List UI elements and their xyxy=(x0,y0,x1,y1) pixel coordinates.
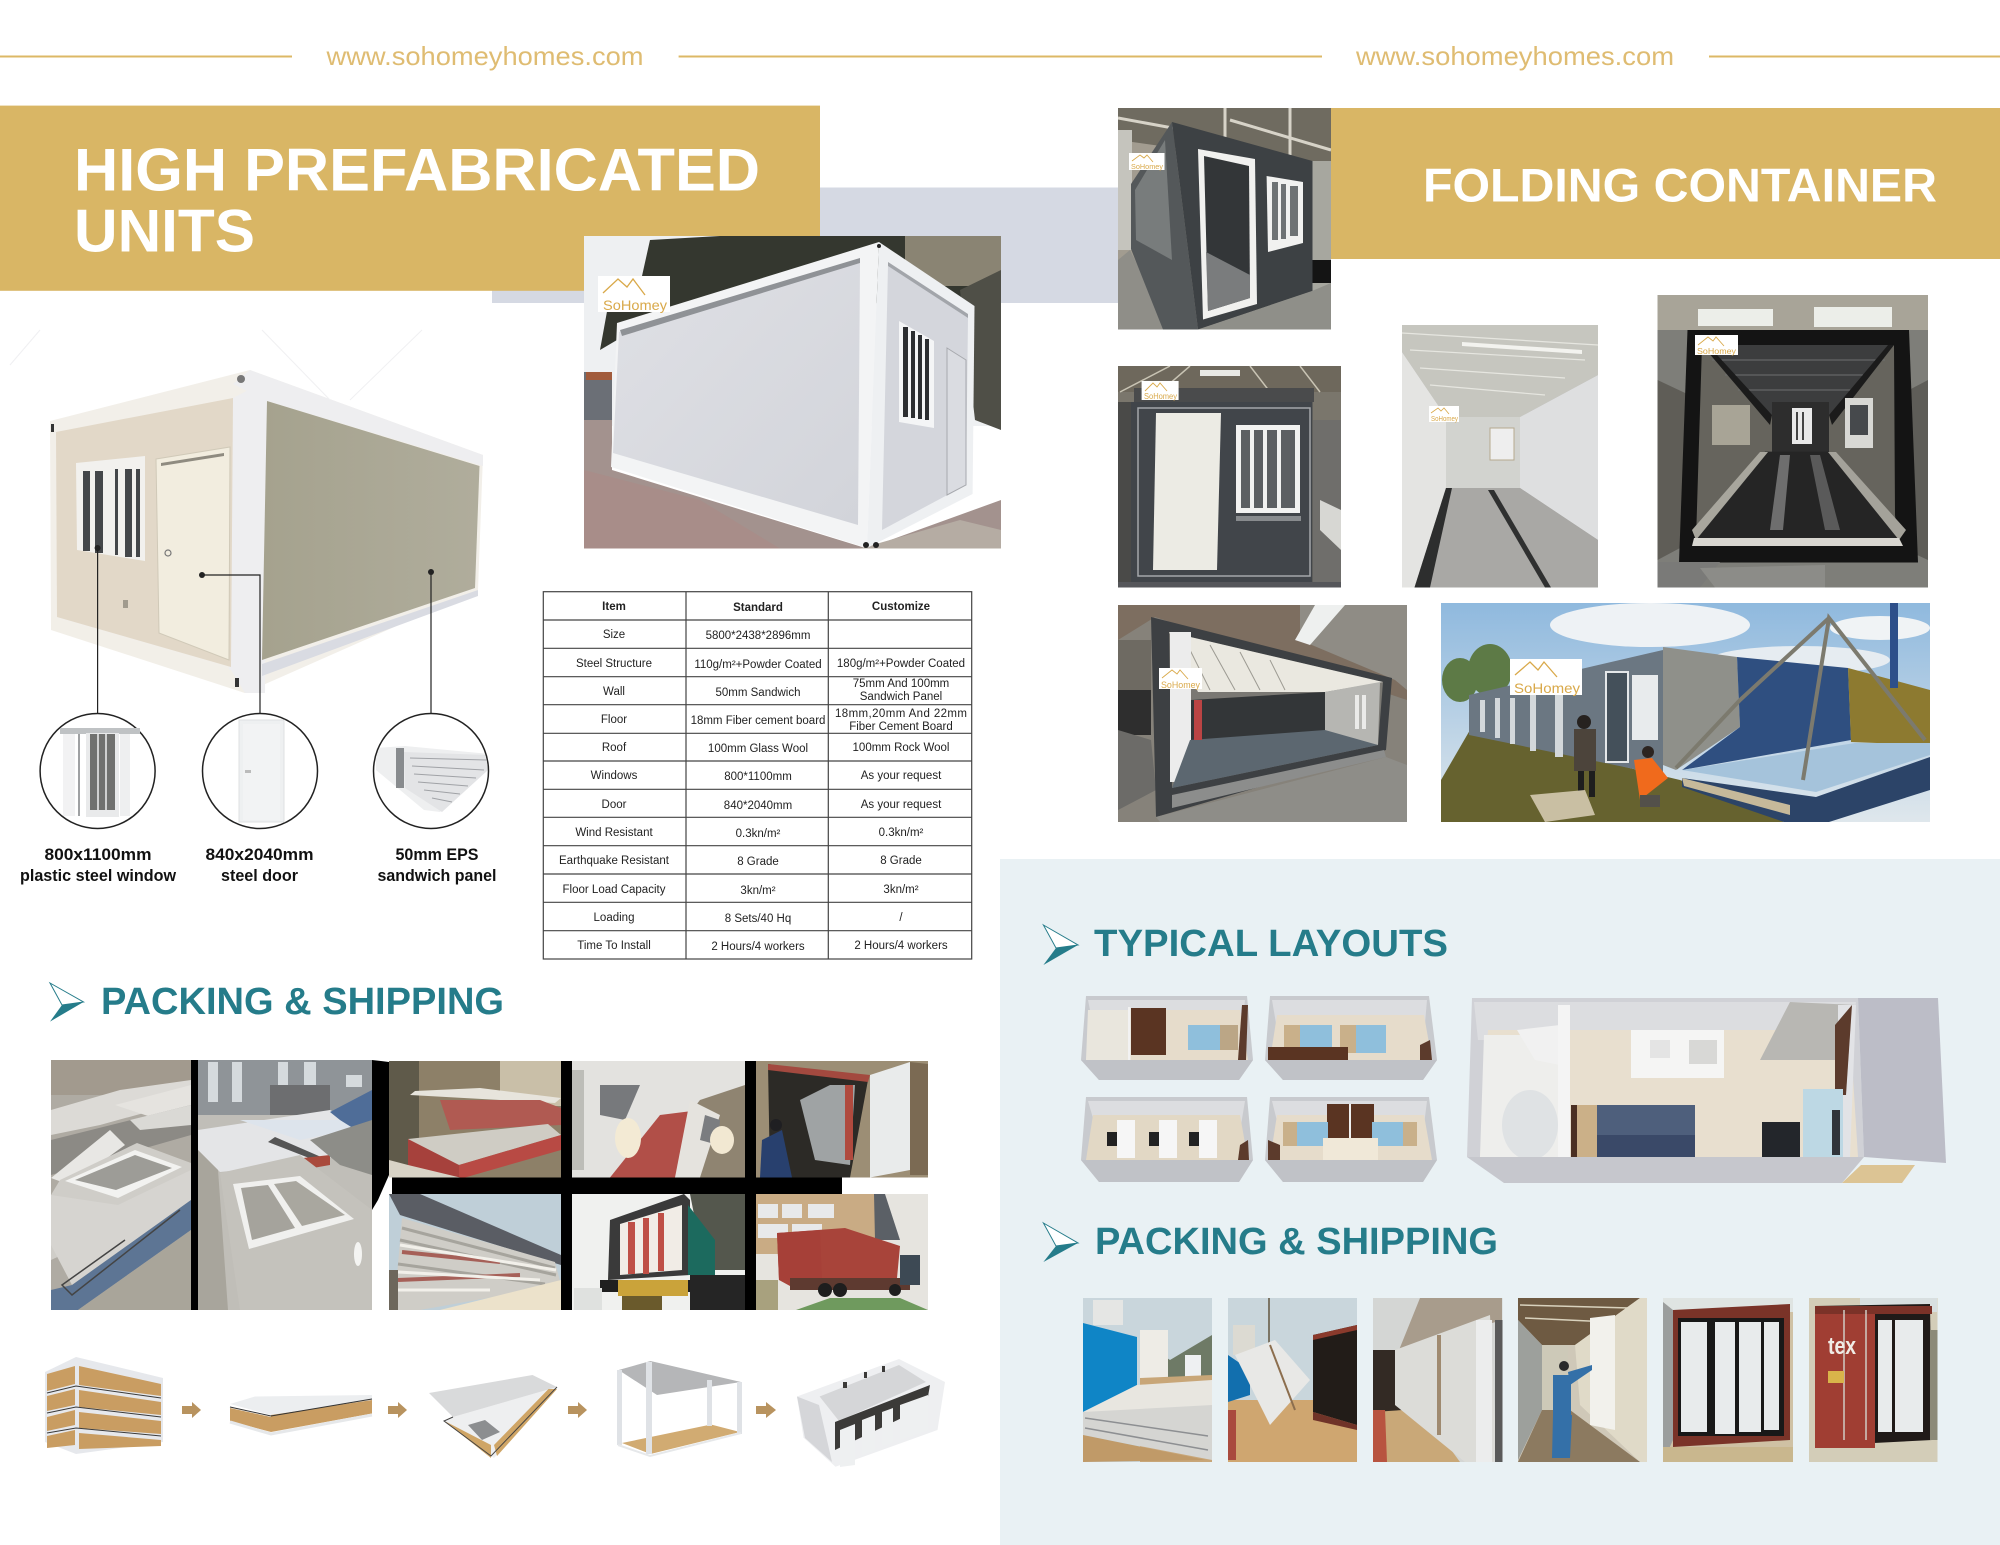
specification table: 75mm And 100mm xyxy=(853,678,949,690)
faint background lines xyxy=(10,330,422,400)
logo badge: SoHomey xyxy=(1431,416,1458,423)
specification table: As your request xyxy=(861,770,942,782)
floor plan: large single room xyxy=(1467,998,1946,1183)
specification table: Earthquake Resistant xyxy=(559,855,670,867)
specification table: Standard xyxy=(733,602,783,614)
callout caption: door: steel door xyxy=(221,867,299,885)
heading: packing and shipping right: PACKING & SHIPPING xyxy=(1095,1221,1498,1263)
floor plan: one bed with bathroom xyxy=(1081,996,1253,1080)
callout leader lines xyxy=(98,548,431,713)
assembly step 5: completed unit with walls folding xyxy=(797,1359,945,1467)
collage photo 2: panels with window frame xyxy=(198,1060,372,1310)
floor plan: two beds with wardrobes xyxy=(1265,1097,1437,1182)
photo: container door and window front xyxy=(1118,366,1341,588)
title banner: high prefabricated units: UNITS xyxy=(74,198,255,264)
logo badge xyxy=(1429,406,1459,423)
black gaps behind collage xyxy=(191,1060,842,1310)
specification table: 18mm Fiber cement board xyxy=(691,715,825,727)
window xyxy=(76,456,145,561)
specification table: 100mm Rock Wool xyxy=(853,742,949,754)
logo badge xyxy=(1510,659,1582,696)
assembly step 3: unfolding unit xyxy=(429,1375,557,1458)
shipping photo 4: worker inside container xyxy=(1518,1298,1647,1462)
specification table: Wind Resistant xyxy=(575,827,653,839)
shipping photo 5: container with stacked white units xyxy=(1663,1298,1793,1462)
logo badge xyxy=(598,276,670,313)
right lower panel background xyxy=(1000,859,2000,1545)
header rule left page xyxy=(0,56,2000,58)
logo badge xyxy=(1142,381,1179,401)
logo badge xyxy=(1695,335,1738,356)
title banner: folding container: FOLDING CONTAINER xyxy=(1423,158,1937,212)
packing photo collage xyxy=(51,1060,928,1310)
logo badge xyxy=(1159,668,1202,690)
specification table: 8 Grade xyxy=(737,856,779,868)
logo badge: SoHomey xyxy=(1144,392,1177,401)
specification table: / xyxy=(899,912,903,924)
callout caption: panel: sandwich panel xyxy=(378,867,496,885)
product illustration: beige prefab container xyxy=(50,370,483,693)
specification table: 5800*2438*2896mm xyxy=(706,630,810,642)
collage photo 5: container loading xyxy=(756,1061,928,1178)
step arrow 4 xyxy=(756,1402,776,1418)
callout caption: door: 840x2040mm xyxy=(206,846,314,864)
specification table: Loading xyxy=(594,912,634,924)
callout caption: window: plastic steel window xyxy=(20,867,176,885)
callout circle: sandwich panel xyxy=(374,714,490,828)
specification table: 100mm Glass Wool xyxy=(708,743,808,755)
callout circle: door xyxy=(202,714,318,828)
shipping photo 6: half closed red container: tex xyxy=(1828,1333,1857,1360)
callout caption: window xyxy=(20,846,176,885)
collage photo 1: panels on floor xyxy=(51,1060,191,1310)
logo badge: SoHomey xyxy=(1514,680,1580,696)
title banner: high prefabricated units: HIGH PREFABRICATED xyxy=(74,136,760,204)
specification table: Sandwich Panel xyxy=(860,691,942,703)
heading: typical layouts: TYPICAL LAYOUTS xyxy=(1094,923,1448,965)
specification table: Windows xyxy=(591,770,638,782)
arrow icon: right packing heading xyxy=(1043,1223,1078,1262)
specification table: Steel Structure xyxy=(576,658,652,670)
specification table: 3kn/m² xyxy=(883,884,919,896)
specification table: Item xyxy=(602,601,626,613)
photo: black frame container unfolded xyxy=(1658,295,1928,588)
specification table xyxy=(543,592,972,959)
callout caption: panel: 50mm EPS xyxy=(396,846,478,864)
title banner: high prefabricated units xyxy=(0,106,820,291)
specification table: 3kn/m² xyxy=(740,885,776,897)
specification table: Fiber Cement Board xyxy=(849,721,953,733)
logo badge xyxy=(1129,153,1164,171)
specification table: 0.3kn/m² xyxy=(879,827,924,839)
photo: dark folding container with open door xyxy=(1118,108,1331,330)
step arrow 1 xyxy=(182,1402,201,1418)
arrow icon: typical layouts heading xyxy=(1043,925,1078,965)
specification table: Customize xyxy=(872,601,930,613)
specification table: 0.3kn/m² xyxy=(736,828,781,840)
khaki side wall xyxy=(262,401,480,660)
step arrow 3 xyxy=(568,1402,587,1418)
specification table: Door xyxy=(602,799,627,811)
door xyxy=(156,447,230,660)
specification table: 2 Hours/4 workers xyxy=(711,941,805,953)
light grey backdrop block xyxy=(492,188,1118,303)
specification table: 18mm,20mm And 22mm xyxy=(835,708,967,720)
callout circle: window xyxy=(40,714,155,828)
shipping photo 1: folded unit beside blue container xyxy=(1083,1298,1212,1462)
heading: packing and shipping left: PACKING & SHIPPING xyxy=(101,981,504,1023)
specification table: 8 Grade xyxy=(880,855,922,867)
collage photo 8: red container on truck xyxy=(756,1194,928,1310)
title banner: folding container xyxy=(1331,108,2000,259)
floor plan: two beds xyxy=(1265,996,1437,1080)
logo badge: SoHomey xyxy=(603,297,667,313)
specification table: Floor Load Capacity xyxy=(563,884,666,896)
photo: container interior corridor xyxy=(1402,325,1598,588)
specification table: Roof xyxy=(602,742,627,754)
callout dots xyxy=(95,545,434,578)
step arrow 2 xyxy=(388,1402,407,1418)
specification table: 2 Hours/4 workers xyxy=(854,940,948,952)
logo badge: SoHomey xyxy=(1131,162,1163,171)
specification table: Floor xyxy=(601,714,627,726)
logo badge: SoHomey xyxy=(1161,680,1200,690)
callout caption: door xyxy=(206,846,314,885)
shipping photo 6: half closed red container xyxy=(1809,1298,1938,1462)
specification table: 8 Sets/40 Hq xyxy=(725,913,791,925)
assembly step 1: stacked folded units xyxy=(45,1357,163,1454)
floor plan: three desks xyxy=(1081,1097,1253,1182)
shipping photo 2: panel tilting into container xyxy=(1228,1298,1357,1462)
photo: white prefab unit outdoors xyxy=(584,236,1001,548)
specification table: 180g/m²+Powder Coated xyxy=(837,658,965,670)
logo badge: SoHomey xyxy=(1697,346,1737,356)
website url right: www.sohomeyhomes.com xyxy=(1355,41,1674,71)
specification table: 840*2040mm xyxy=(724,800,792,812)
callout caption: panel xyxy=(378,846,496,885)
specification table: 800*1100mm xyxy=(724,771,792,783)
specification table: 110g/m²+Powder Coated xyxy=(694,659,822,671)
photo: open container in factory xyxy=(1118,605,1407,822)
specification table: Size xyxy=(603,629,625,641)
collage photo 6: striped panel stack xyxy=(389,1194,561,1310)
collage photo 4: caster wheels xyxy=(572,1061,745,1178)
assembly step 4: open frame xyxy=(617,1361,742,1456)
beige front wall xyxy=(56,398,233,667)
specification table: 50mm Sandwich xyxy=(715,687,801,699)
arrow icon: left packing heading xyxy=(50,983,84,1022)
shipping photo 3: white wall panel in front of container xyxy=(1373,1298,1502,1462)
specification table: Wall xyxy=(603,686,625,698)
photo: crane lifting folding container wall xyxy=(1441,603,1930,822)
collage photo 3: red edged tray xyxy=(389,1061,561,1178)
assembly step 2: flat folded unit xyxy=(230,1395,372,1434)
collage photo 7: truck with red and white load xyxy=(572,1194,745,1310)
callout caption: window: 800x1100mm xyxy=(44,846,152,864)
website url left: www.sohomeyhomes.com xyxy=(325,41,644,71)
specification table: Time To Install xyxy=(577,940,651,952)
specification table: As your request xyxy=(861,799,942,811)
